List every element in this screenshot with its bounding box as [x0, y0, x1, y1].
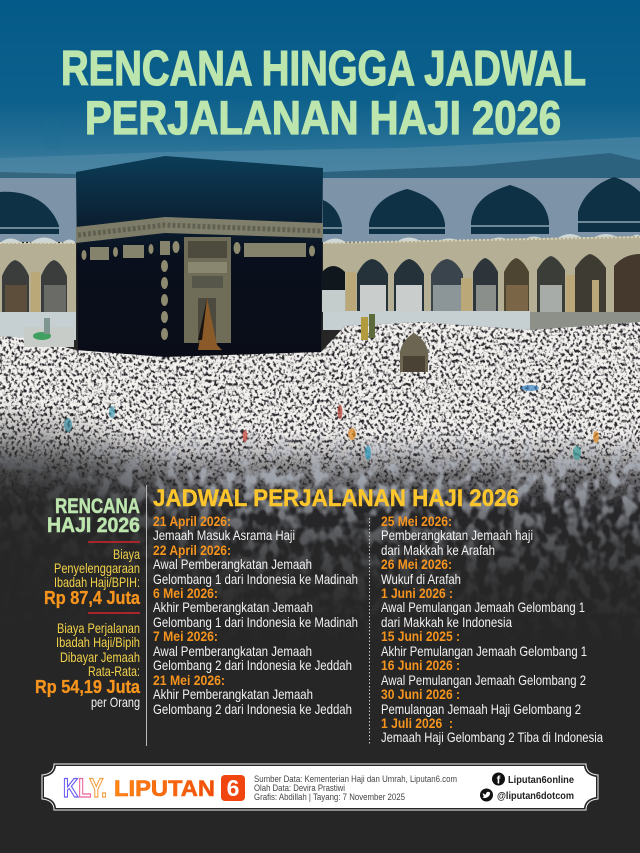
dotted divider — [368, 518, 370, 745]
arcade rails — [0, 222, 640, 228]
banner fill — [44, 766, 596, 808]
schedule left column: 21 April 2026: — [153, 513, 231, 529]
BPIH text — [54, 546, 140, 590]
schedule right column: 25 Mei 2026: — [381, 513, 452, 529]
logo: LIPUTAN: LIPUTAN — [114, 776, 215, 801]
heading — [47, 495, 140, 537]
schedule left column: Gelombang 1 dari Indonesia ke Madinah — [153, 614, 358, 630]
icon: twitter — [480, 788, 493, 802]
Bipih text: Rata-Rata: — [88, 663, 140, 679]
photo: mosque architecture — [0, 0, 640, 340]
schedule right column: Pemberangkatan Jemaah haji — [381, 527, 533, 543]
schedule right column: dari Makkah ke Arafah — [381, 542, 495, 558]
columns — [31, 272, 599, 320]
lower arches — [2, 254, 640, 320]
schedule left column: Jemaah Masuk Asrama Haji — [153, 527, 295, 543]
BPIH value: Rp 87,4 Juta — [44, 588, 141, 608]
upper wall — [0, 178, 640, 242]
white base wall — [0, 311, 530, 340]
schedule left column: 21 Mei 2026: — [153, 672, 225, 688]
source credits: Grafis: Abdillah | Tayang: 7 November 2025 — [254, 792, 405, 802]
cream arcade — [0, 236, 640, 330]
BPIH text: Ibadah Haji/BPIH: — [54, 574, 140, 590]
schedule right column — [381, 513, 603, 745]
gold calligraphy band — [76, 217, 323, 243]
schedule right column: Pemulangan Jemaah Haji Gelombang 2 — [381, 701, 581, 717]
vertical divider — [146, 485, 147, 746]
lower arch interiors — [5, 285, 562, 312]
schedule right column: 15 Juni 2025 : — [381, 628, 460, 644]
BPIH text: Penyelenggaraan — [54, 560, 140, 576]
icon: facebook: f — [497, 774, 501, 786]
schedule right column: Awal Pemulangan Jemaah Gelombang 1 — [381, 599, 585, 615]
BPIH text: Biaya — [113, 546, 140, 562]
per orang: per Orang — [91, 694, 140, 710]
schedule right column: 26 Mei 2026: — [381, 556, 452, 572]
parapet — [0, 237, 640, 243]
panel: rencana haji 2026 — [35, 495, 141, 710]
schedule right column: 1 Juni 2026 : — [381, 585, 453, 601]
banner frame — [42, 764, 598, 810]
divider bottom — [88, 612, 140, 614]
schedule left column: Akhir Pemberangkatan Jemaah — [153, 599, 313, 615]
schedule left column: Awal Pemberangkatan Jemaah — [153, 556, 312, 572]
Maqam Ibrahim — [400, 333, 428, 372]
logo: 6 badge — [221, 775, 245, 801]
bottom fade to dark — [0, 450, 640, 645]
schedule left column: 6 Mei 2026: — [153, 585, 218, 601]
left platform — [24, 318, 74, 347]
schedule left column: Awal Pemberangkatan Jemaah — [153, 643, 312, 659]
source credits — [254, 774, 457, 802]
upper arches — [0, 177, 640, 234]
plaques — [90, 241, 306, 260]
gold poles — [361, 314, 375, 340]
right face — [165, 156, 323, 362]
schedule left column: 7 Mei 2026: — [153, 628, 218, 644]
footer banner — [42, 764, 598, 810]
schedule left column: Gelombang 1 dari Indonesia ke Madinah — [153, 571, 358, 587]
source credits: Sumber Data: Kementerian Haji dan Umrah, Liputan6.com — [254, 774, 457, 784]
lower dark area — [0, 640, 640, 853]
schedule left column: 22 April 2026: — [153, 542, 231, 558]
logo: 6 badge: 6 — [227, 775, 239, 801]
medallions — [82, 241, 315, 340]
heading: jadwal perjalanan: JADWAL PERJALANAN HAJI 2026 — [153, 485, 519, 512]
crowd base — [0, 322, 640, 660]
Bipih value: Rp 54,19 Juta — [35, 677, 141, 697]
heading: HAJI 2026 — [47, 514, 140, 537]
roof structure — [0, 92, 640, 182]
source credits: Olah Data: Devira Prastiwi — [254, 783, 345, 793]
title — [61, 42, 586, 144]
schedule left column: Akhir Pemberangkatan Jemaah — [153, 686, 313, 702]
large figures layer — [0, 423, 640, 613]
white domes — [0, 234, 640, 243]
schedule right column: 16 Juni 2026 : — [381, 657, 460, 673]
icon: facebook — [492, 772, 505, 786]
door curtain — [184, 237, 231, 343]
left face — [76, 156, 165, 362]
twitter handle: @liputan6dotcom — [497, 791, 574, 802]
heading: RENCANA — [55, 495, 140, 518]
facebook handle: Liputan6online — [508, 775, 574, 786]
schedule left column: Gelombang 2 dari Indonesia ke Jeddah — [153, 701, 352, 717]
schedule right column: 30 Juni 2026 : — [381, 686, 460, 702]
schedule right column: Akhir Pemulangan Jemaah Gelombang 1 — [381, 643, 587, 659]
schedule right column: 1 Juli 2026 : — [381, 715, 453, 731]
small crowd layer — [0, 320, 640, 510]
Bipih text: Biaya Perjalanan — [57, 620, 140, 636]
Bipih text — [56, 620, 140, 679]
Bipih text: Ibadah Haji/Bipih — [56, 634, 140, 650]
icon: Kaaba — [76, 156, 323, 362]
schedule left column: Gelombang 2 dari Indonesia ke Jeddah — [153, 657, 352, 673]
Bipih text: Dibayar Jemaah — [60, 649, 140, 665]
title: PERJALANAN HAJI 2026 — [85, 91, 561, 144]
door opening — [198, 298, 222, 350]
logo: KLY: KLY. — [63, 773, 107, 803]
photo: crowd — [0, 314, 640, 614]
divider top — [88, 541, 140, 543]
sky and upper storey — [0, 0, 640, 182]
schedule left column — [153, 513, 358, 717]
schedule right column: dari Makkah ke Indonesia — [381, 614, 512, 630]
schedule right column: Wukuf di Arafah — [381, 571, 461, 587]
coloured clothing spots — [64, 385, 599, 460]
left side shade — [0, 400, 240, 645]
schedule right column: Awal Pemulangan Jemaah Gelombang 2 — [381, 672, 586, 688]
